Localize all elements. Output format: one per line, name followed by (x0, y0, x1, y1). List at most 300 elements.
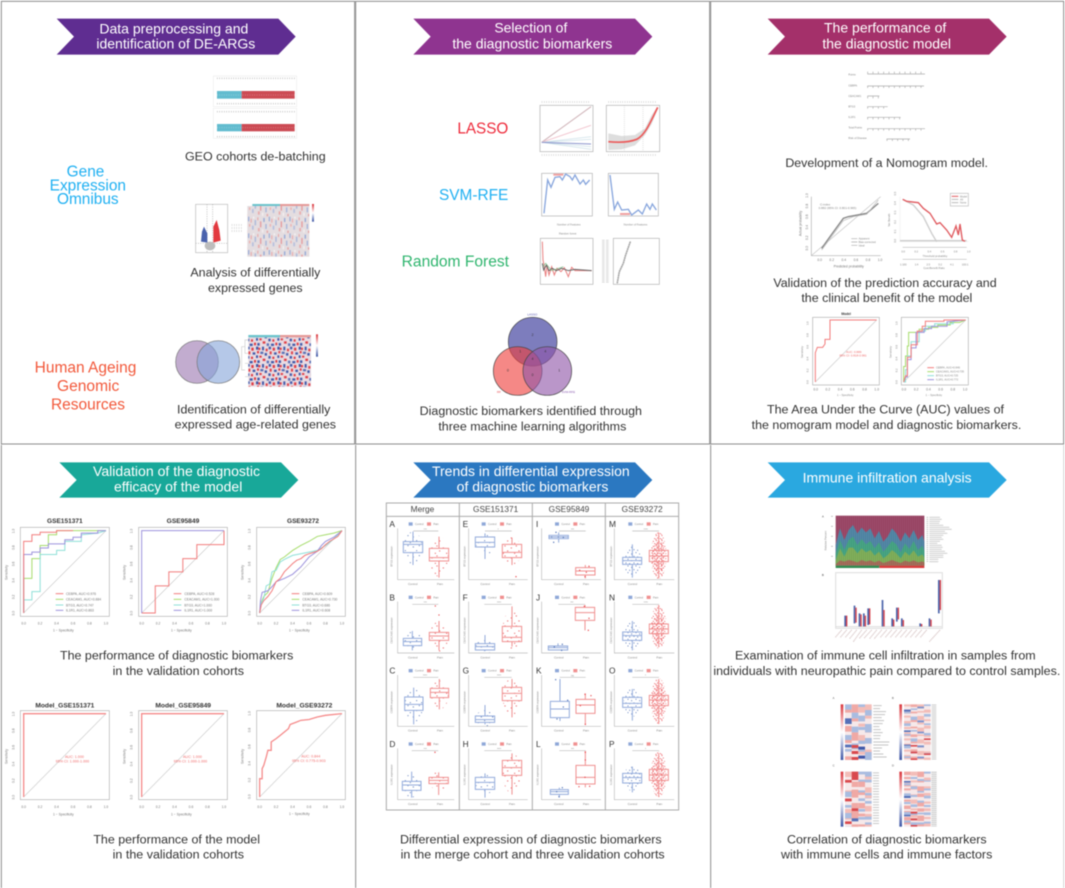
chart: calibration curve: Actual probability (798, 210, 802, 236)
chart: ROC GSE95849: GSE95849 (167, 518, 200, 525)
chart: nomogram ROC: 0.0 0.2 0.4 0.6 0.8 1.0 (813, 388, 879, 392)
boxplot E: BTG3 GSE151371 (463, 519, 528, 586)
boxplot E: BTG3 GSE151371: Control (480, 582, 490, 586)
boxplot D: IL1R1 merge: Control (408, 802, 418, 806)
boxplot E: BTG3 GSE151371: Pain (506, 522, 512, 526)
boxplot J: CEACAM1 GSE95849: *** (570, 601, 573, 605)
caption: differential expression: in the merge cohort and three validation cohorts (401, 848, 665, 862)
chart: three-set venn diagram: 4 (532, 357, 534, 361)
chart: biomarker ROC (889, 317, 968, 397)
boxplot B: CEACAM1 merge: Control (415, 595, 424, 599)
boxplot N: CEACAM1 GSE93272: Control (628, 655, 638, 659)
boxplot D: IL1R1 merge: D (389, 739, 395, 749)
boxplot B: CEACAM1 merge: CEACAM1 expression (389, 617, 393, 644)
source label: Gene Expression Omnibus: Expression (50, 177, 126, 194)
heading arrow: trends: Trends in differential expression (432, 463, 630, 479)
caption: validation of accuracy: the clinical benefit of the model (801, 291, 972, 305)
chart: model ROC GSE151371: Sensitivity (4, 749, 8, 764)
chart: model ROC GSE93272: Model_GSE93272 (276, 703, 333, 710)
boxplot B: CEACAM1 merge: B (389, 592, 395, 602)
caption: three algorithms (420, 404, 642, 433)
source label: Gene Expression Omnibus: Gene (67, 163, 104, 180)
chart: model ROC GSE151371 (4, 703, 109, 816)
boxplot A: BTG3 merge (389, 519, 454, 586)
source label: Human Ageing Genomic Resources: Resources (51, 397, 125, 414)
chart: ROC GSE151371: Sensitivity (4, 565, 8, 580)
source label: Gene Expression Omnibus: Omnibus (57, 191, 119, 208)
boxplot B: CEACAM1 merge: Control (408, 655, 418, 659)
chart: three-set venn diagram: RF (497, 390, 501, 394)
chart: ROC GSE95849: 0.0 0.2 0.4 0.6 0.8 1.0 (130, 529, 134, 616)
chart: ROC GSE93272: 1 − Specificity (289, 629, 310, 633)
chart: biomarker ROC: 1 − Specificity (926, 393, 943, 397)
boxplot D: IL1R1 merge: Control (415, 742, 424, 746)
chart: biomarker ROC: Sensitivity (889, 345, 893, 358)
boxplot E: BTG3 GSE151371: Control (488, 522, 497, 526)
chart: ROC GSE151371: BTG3, AUC=0.747 (66, 603, 94, 607)
chart: ROC GSE151371 (4, 518, 109, 633)
boxplot P: IL1R1 GSE93272: IL1R1 expression (609, 764, 613, 785)
boxplot P: IL1R1 GSE93272: Control (635, 742, 644, 746)
boxplot M: BTG3 GSE93272: Pain (653, 522, 659, 526)
boxplot C: CEBPA merge: Pain (437, 729, 443, 733)
chart: three-set venn diagram (493, 313, 575, 395)
boxplot L: IL1R1 GSE95849: *** (571, 747, 574, 751)
caption: nomogram: Development of a Nomogram model. (785, 156, 988, 170)
chart: three-set venn diagram: 1 (558, 368, 560, 372)
chart: nomogram: BTG3 (848, 104, 856, 108)
boxplot P: IL1R1 GSE93272: P (609, 739, 615, 749)
chart: nomogram: Total Points (848, 125, 863, 129)
boxplot K: CEBPA GSE95849: ns (571, 675, 574, 678)
panel: trends in differential expression (356, 445, 679, 888)
table frame with column headers: Merge (411, 505, 435, 514)
panel: selection of biomarkers (356, 1, 710, 444)
boxplot A: BTG3 merge: BTG3 expression (389, 546, 393, 567)
chart: two-set venn diagram (176, 341, 240, 383)
boxplot M: BTG3 GSE93272 (609, 519, 674, 586)
chart: ROC GSE93272: BTG3, AUC=0.686 (302, 603, 330, 607)
boxplot L: IL1R1 GSE95849: Control (561, 742, 570, 746)
chart: ROC GSE93272: CEBPA, AUC=0.609 (302, 592, 332, 596)
chart: model ROC GSE93272: AUC: 0.844 (301, 755, 320, 759)
chart: model ROC GSE93272: 95% CI: 0.775-0.903 (292, 759, 326, 763)
chart: three-set venn diagram: SVM-RFE (562, 390, 575, 394)
caption: differential expression (400, 833, 665, 862)
chart: decision curve: Cost:Benefit Ratio (923, 266, 945, 270)
boxplot G: CEBPA GSE151371: CEBPA expression (463, 691, 467, 713)
boxplot L: IL1R1 GSE95849: IL1R1 expression (536, 764, 540, 785)
boxplot M: BTG3 GSE93272: Control (628, 582, 638, 586)
heading arrow: data preprocessing (57, 19, 296, 55)
chart: ROC GSE95849: CEBPA, AUC=0.528 (184, 592, 214, 596)
boxplot F: CEACAM1 GSE151371: Pain (509, 655, 515, 659)
boxplot F: CEACAM1 GSE151371: Pain (506, 595, 512, 599)
boxplot A: BTG3 merge: A (389, 519, 395, 529)
heading arrow: selection (413, 19, 652, 55)
chart: ROC GSE151371: 0.0 0.2 0.4 0.6 0.8 1.0 (21, 622, 108, 626)
chart: correlation heatmap D: D (892, 763, 894, 767)
boxplot N: CEACAM1 GSE93272: Pain (656, 655, 663, 659)
boxplot H: IL1R1 GSE151371: Pain (506, 742, 512, 746)
boxplot K: CEBPA GSE95849: Pain (580, 669, 586, 673)
boxplot I: BTG3 GSE95849: *** (571, 527, 574, 531)
boxplot A: BTG3 merge: Pain (437, 582, 443, 586)
boxplot H: IL1R1 GSE151371 (463, 739, 528, 806)
chart: model ROC GSE151371: 1 − Specificity (53, 812, 74, 816)
boxplot O: CEBPA GSE93272: CEBPA expression (609, 691, 613, 713)
boxplot J: CEACAM1 GSE95849: CEACAM1 expression (536, 617, 540, 644)
caption: model in validation: in the validation cohorts (113, 848, 244, 862)
chart: nomogram ROC: 1 − Specificity (837, 393, 854, 397)
heading arrow: validation: Validation of the diagnostic (93, 463, 260, 479)
chart: model ROC GSE93272 (240, 703, 345, 816)
chart: ROC GSE95849: IL1R1, AUC=1.000 (184, 609, 212, 613)
caption: DEG analysis: expressed genes (208, 281, 303, 295)
caption: validation of accuracy (773, 276, 997, 305)
caption: DEG analysis: Analysis of differentially (190, 266, 321, 280)
chart: nomogram ROC (800, 312, 879, 397)
chart: three-set venn diagram: 2 (532, 333, 534, 337)
boxplot B: CEACAM1 merge: Pain (437, 655, 443, 659)
table frame with column headers: GSE93272 (622, 505, 663, 514)
heading arrow: validation (59, 462, 298, 498)
chart: model ROC GSE95849 (122, 703, 227, 816)
caption: differential expression: Differential expression of diagnostic biomarkers (400, 833, 662, 847)
boxplot O: CEBPA GSE93272: O (609, 666, 616, 676)
boxplot D: IL1R1 merge: *** (424, 747, 427, 751)
chart: model ROC GSE95849: 0.0 0.2 0.4 0.6 0.8 1.0 (139, 805, 226, 809)
label: Random Forest: Random Forest (402, 254, 510, 271)
panel: model performance (711, 1, 1064, 444)
boxplot L: IL1R1 GSE95849: L (536, 739, 541, 749)
chart: calibration curve (798, 193, 883, 269)
caption: biomarkers in validation: in the validation cohorts (113, 664, 244, 678)
boxplot H: IL1R1 GSE151371: Control (488, 742, 497, 746)
chart: model ROC GSE95849: AUC: 1.000 (183, 755, 202, 759)
chart: ROC GSE93272: IL1R1, AUC=0.608 (302, 609, 330, 613)
chart: correlation heatmap D (892, 763, 934, 827)
heading arrow: data preprocessing: identification of DE-ARGs (96, 36, 255, 52)
chart: correlation heatmap C: C (833, 763, 835, 767)
chart: model ROC GSE93272: Sensitivity (240, 749, 244, 764)
heading arrow: immune infiltration: Immune infiltration analysis (803, 470, 972, 486)
chart: nomogram ROC: Model (841, 312, 851, 316)
caption: correlation: Correlation of diagnostic biomarkers (787, 833, 987, 847)
boxplot A: BTG3 merge: Pain (433, 522, 439, 526)
chart: ROC GSE151371: CEACAM1, AUC=0.884 (66, 598, 101, 602)
chart: SVM-RFE error: Number of Features (624, 222, 648, 226)
boxplot P: IL1R1 GSE93272: Pain (656, 802, 663, 806)
chart: biomarker ROC: CEACAM1, AUC=0.735 (936, 370, 964, 374)
chart: immune cell boxplots: B (822, 573, 824, 577)
boxplot O: CEBPA GSE93272: * (645, 674, 646, 678)
boxplot O: CEBPA GSE93272: Control (635, 669, 644, 673)
chart: ROC GSE95849: 1 − Specificity (171, 629, 192, 633)
chart: LASSO cross-validation (606, 102, 660, 155)
boxplot N: CEACAM1 GSE93272: N (609, 592, 615, 602)
chart: model ROC GSE93272: 0.0 0.2 0.4 0.6 0.8 1.0 (248, 711, 252, 799)
chart: nomogram ROC: 95% CI: 0.818-0.961 (839, 354, 867, 358)
panel: data preprocessing (1, 1, 355, 444)
boxplot G: CEBPA GSE151371: **** (497, 674, 501, 678)
chart: age-related heatmap (242, 334, 318, 387)
chart: nomogram: Points (848, 73, 856, 77)
boxplot K: CEBPA GSE95849: Control (554, 729, 564, 733)
boxplot D: IL1R1 merge: Pain (437, 802, 443, 806)
chart: immune cell boxplots (822, 573, 942, 642)
chart: model ROC GSE95849: Model_GSE95849 (155, 703, 211, 710)
chart: three-set venn diagram: LASSO (527, 313, 538, 317)
chart: nomogram: IL1R1 (848, 115, 856, 119)
boxplot J: CEACAM1 GSE95849: Pain (580, 595, 586, 599)
chart: ROC GSE151371: IL1R1, AUC=0.863 (66, 609, 94, 613)
boxplot K: CEBPA GSE95849 (536, 666, 601, 733)
table frame with column headers: GSE95849 (549, 505, 590, 514)
caption: age-related genes: expressed age-related genes (175, 418, 336, 432)
chart: random forest error (540, 232, 593, 284)
boxplot H: IL1R1 GSE151371: Control (480, 802, 490, 806)
chart: ROC GSE93272: CEACAM1, AUC=0.730 (302, 598, 338, 602)
chart: ROC GSE95849: CEACAM1, AUC=1.000 (184, 598, 220, 602)
chart: ROC GSE93272: GSE93272 (287, 518, 319, 525)
caption: biomarkers in validation (60, 649, 293, 678)
chart: model ROC GSE95849: 1 − Specificity (171, 812, 192, 816)
boxplot P: IL1R1 GSE93272: * (645, 747, 646, 751)
chart: three-set venn diagram: 0 (532, 373, 534, 377)
chart: SVM-RFE accuracy: Number of Features (557, 222, 581, 226)
boxplot L: IL1R1 GSE95849: Control (554, 802, 564, 806)
boxplot N: CEACAM1 GSE93272: Control (635, 595, 644, 599)
boxplot G: CEBPA GSE151371: Pain (509, 729, 515, 733)
source label: Human Ageing Genomic Resources (35, 359, 136, 414)
chart: ROC GSE93272: 0.0 0.2 0.4 0.6 0.8 1.0 (257, 622, 344, 626)
boxplot A: BTG3 merge: Control (408, 582, 418, 586)
boxplot O: CEBPA GSE93272 (609, 666, 674, 733)
chart: biomarker ROC: IL1R1, AUC=0.772 (936, 378, 959, 382)
caption: immune infiltration: individuals with neuropathic pain compared to control samples. (713, 664, 1060, 678)
boxplot M: BTG3 GSE93272: Pain (656, 582, 663, 586)
panel: immune infiltration (711, 445, 1064, 888)
boxplot J: CEACAM1 GSE95849: J (536, 592, 540, 602)
chart: ROC GSE95849: 0.0 0.2 0.4 0.6 0.8 1.0 (139, 622, 226, 626)
heading arrow: trends (413, 462, 652, 498)
heading arrow: performance (768, 19, 1007, 55)
chart: three-set venn diagram: 1 (519, 350, 521, 354)
chart: decision curve (887, 191, 971, 270)
chart: ROC GSE151371: GSE151371 (47, 518, 83, 525)
chart: nomogram ROC: AUC: 0.889 (846, 350, 862, 354)
boxplot G: CEBPA GSE151371 (463, 666, 528, 733)
boxplot K: CEBPA GSE95849: K (536, 666, 542, 676)
boxplot H: IL1R1 GSE151371: **** (497, 747, 501, 751)
chart: decision curve: Model (960, 194, 968, 198)
chart: volcano plot (196, 204, 242, 253)
boxplot N: CEACAM1 GSE93272: CEACAM1 expression (609, 617, 613, 644)
heading arrow: performance: the diagnostic model (822, 36, 951, 52)
chart: batch-corrected boxplots (213, 76, 297, 138)
chart: calibration curve: Ideal (859, 243, 865, 247)
caption: AUC values (752, 403, 1021, 432)
chart: decision curve: 0.0 0.1 0.2 0.3 0.4 0.5 (893, 191, 897, 243)
chart: immune cell stacked bars: Relative Percent (823, 531, 827, 550)
chart: LASSO coefficient paths (540, 102, 593, 155)
chart: calibration curve: Apparent (859, 237, 870, 241)
chart: nomogram ROC: Sensitivity (800, 345, 804, 358)
boxplot I: BTG3 GSE95849: BTG3 expression (536, 546, 540, 567)
chart: decision curve: None (960, 201, 967, 205)
chart: SVM-RFE accuracy (542, 173, 592, 226)
chart: model ROC GSE95849: Sensitivity (122, 749, 126, 764)
boxplot J: CEACAM1 GSE95849: Pain (583, 655, 589, 659)
boxplot J: CEACAM1 GSE95849 (536, 592, 601, 659)
chart: nomogram: Risk of Disease (848, 136, 867, 140)
chart: biomarker ROC: BTG3, AUC=0.725 (936, 374, 959, 378)
caption: model in validation: The performance of the model (93, 833, 260, 847)
chart: ROC GSE151371: 0.0 0.2 0.4 0.6 0.8 1.0 (12, 529, 16, 616)
chart: ROC GSE95849: Sensitivity (122, 565, 126, 580)
boxplot I: BTG3 GSE95849: Pain (580, 522, 586, 526)
caption: immune infiltration: Examination of immune cell infiltration in samples from (735, 649, 1036, 663)
chart: ROC GSE93272: 0.0 0.2 0.4 0.6 0.8 1.0 (248, 529, 252, 616)
chart: correlation heatmap B (892, 696, 934, 760)
chart: calibration curve: Bias-corrected (859, 240, 876, 244)
chart: decision curve: All (960, 197, 963, 201)
chart: random forest importance (603, 238, 659, 284)
chart: three-set venn diagram: 0 (507, 368, 509, 372)
boxplot G: CEBPA GSE151371: Control (480, 729, 490, 733)
chart: nomogram ROC: 0.0 0.2 0.4 0.6 0.8 1.0 (806, 321, 810, 384)
chart: model ROC GSE151371: 0.0 0.2 0.4 0.6 0.8 1.0 (21, 805, 108, 809)
chart: ROC GSE93272: Sensitivity (240, 565, 244, 580)
caption: AUC values: the nomogram model and diagnostic biomarkers. (752, 418, 1021, 432)
chart: correlation heatmap C (833, 763, 876, 827)
boxplot C: CEBPA merge: Control (408, 729, 418, 733)
boxplot G: CEBPA GSE151371: Pain (506, 669, 512, 673)
boxplot M: BTG3 GSE93272: Control (635, 522, 644, 526)
chart: biomarker ROC: CEBPA, AUC=0.846 (936, 366, 960, 370)
caption: model in validation (93, 833, 260, 862)
heading arrow: performance: The performance of (824, 20, 946, 36)
boxplot H: IL1R1 GSE151371: H (463, 739, 469, 749)
boxplot A: BTG3 merge: Control (415, 522, 424, 526)
heading arrow: immune infiltration (768, 462, 1007, 498)
boxplot F: CEACAM1 GSE151371: **** (497, 601, 501, 605)
boxplot L: IL1R1 GSE95849: Pain (583, 802, 589, 806)
chart: decision curve: 0.0 0.2 0.4 0.6 0.8 1.0 (901, 250, 971, 254)
boxplot J: CEACAM1 GSE95849: Control (554, 655, 564, 659)
boxplot I: BTG3 GSE95849: I (536, 519, 538, 529)
boxplot C: CEBPA merge (389, 666, 454, 733)
boxplot K: CEBPA GSE95849: CEBPA expression (536, 691, 540, 713)
boxplot C: CEBPA merge: Control (415, 669, 424, 673)
caption: correlation (780, 833, 992, 862)
boxplot P: IL1R1 GSE93272 (609, 739, 674, 806)
chart: decision curve: 1:100 1:4 2:3 3:2 4:1 100:1 (900, 263, 969, 267)
caption: validation of accuracy: Validation of the prediction accuracy and (773, 276, 997, 290)
boxplot L: IL1R1 GSE95849: Pain (580, 742, 586, 746)
chart: model ROC GSE93272: 1 − Specificity (289, 812, 310, 816)
caption: immune infiltration (713, 649, 1060, 678)
caption: DEG analysis (190, 266, 321, 295)
boxplot G: CEBPA GSE151371: G (463, 666, 469, 676)
chart: correlation heatmap A: A (833, 696, 835, 700)
chart: model ROC GSE95849: 95% CI: 1.000-1.000 (174, 759, 207, 763)
chart: calibration curve: 0.882 (95% CI: 0.801-0.965) (819, 206, 856, 210)
table frame with column headers: GSE151371 (473, 505, 519, 514)
caption: AUC values: The Area Under the Curve (AUC) values of (767, 403, 1005, 417)
caption: three algorithms: three machine learning algorithms (438, 419, 626, 433)
chart: biomarker ROC: 0.0 0.2 0.4 0.6 0.8 1.0 (894, 321, 898, 384)
chart: ROC GSE151371: CEBPA, AUC=0.976 (66, 592, 96, 596)
chart: ROC GSE95849: BTG3, AUC=1.000 (184, 603, 212, 607)
chart: ROC GSE93272 (240, 518, 345, 633)
chart: SVM-RFE error (608, 173, 658, 226)
boxplot I: BTG3 GSE95849: Pain (583, 582, 589, 586)
chart: decision curve: Threshold probability (923, 254, 948, 258)
chart: model ROC GSE151371: 0.0 0.2 0.4 0.6 0.8 1.0 (12, 712, 16, 800)
boxplot A: BTG3 merge: *** (424, 527, 427, 531)
boxplot J: CEACAM1 GSE95849: Control (561, 595, 570, 599)
boxplot E: BTG3 GSE151371: Pain (509, 582, 515, 586)
boxplot I: BTG3 GSE95849: Control (561, 522, 570, 526)
boxplot E: BTG3 GSE151371: E (463, 519, 469, 529)
boxplot C: CEBPA merge: C (389, 666, 395, 676)
chart: ROC GSE95849 (122, 518, 227, 633)
chart: random forest error: Random forest (559, 232, 577, 236)
boxplot H: IL1R1 GSE151371: Pain (509, 802, 515, 806)
source label: Gene Expression Omnibus (50, 163, 126, 208)
caption: age-related genes: Identification of differentially (177, 402, 331, 416)
boxplot O: CEBPA GSE93272: Pain (656, 729, 663, 733)
boxplot D: IL1R1 merge: Pain (433, 742, 439, 746)
boxplot C: CEBPA merge: CEBPA expression (389, 691, 393, 713)
chart: correlation heatmap B: B (892, 696, 894, 700)
boxplot P: IL1R1 GSE93272: Pain (653, 742, 659, 746)
boxplot P: IL1R1 GSE93272: Control (628, 802, 638, 806)
boxplot F: CEACAM1 GSE151371: CEACAM1 expression (463, 617, 467, 644)
source label: Human Ageing Genomic Resources: Genomic (57, 378, 120, 395)
caption: three algorithms: Diagnostic biomarkers identified through (420, 404, 642, 418)
caption: biomarkers in validation: The performance of diagnostic biomarkers (60, 649, 293, 663)
chart: calibration curve: 0.0 0.2 0.4 0.6 0.8 1.0 (805, 193, 809, 251)
boxplot N: CEACAM1 GSE93272: Pain (653, 595, 659, 599)
boxplot D: IL1R1 merge (389, 739, 454, 806)
boxplot G: CEBPA GSE151371: Control (488, 669, 497, 673)
chart: immune cell stacked bars (822, 515, 952, 568)
chart: decision curve: Net Benefit (887, 213, 891, 227)
boxplot I: BTG3 GSE95849 (536, 519, 601, 586)
chart: nomogram: CEBPA (848, 83, 857, 87)
chart: three-set venn diagram: 4 (544, 350, 546, 354)
chart: biomarker ROC: 0.0 0.2 0.4 0.6 0.8 1.0 (902, 388, 968, 392)
chart: model ROC GSE151371: Model_GSE151371 (35, 703, 95, 710)
boxplot F: CEACAM1 GSE151371: Control (488, 595, 497, 599)
caption: age-related genes (175, 402, 336, 432)
boxplot F: CEACAM1 GSE151371: Control (480, 655, 490, 659)
chart: model ROC GSE151371: AUC: 1.000 (65, 755, 84, 759)
chart: immune cell stacked bars: A (822, 515, 824, 519)
boxplot K: CEBPA GSE95849: Control (561, 669, 570, 673)
chart: nomogram (848, 73, 925, 140)
chart: calibration curve: Predicted probability (834, 265, 864, 269)
heading arrow: validation: efficacy of the model (114, 479, 242, 495)
boxplot F: CEACAM1 GSE151371: F (463, 592, 468, 602)
boxplot C: CEBPA merge: Pain (433, 669, 439, 673)
boxplot B: CEACAM1 merge: Pain (433, 595, 439, 599)
boxplot M: BTG3 GSE93272: M (609, 519, 616, 529)
boxplot O: CEBPA GSE93272: Pain (653, 669, 659, 673)
